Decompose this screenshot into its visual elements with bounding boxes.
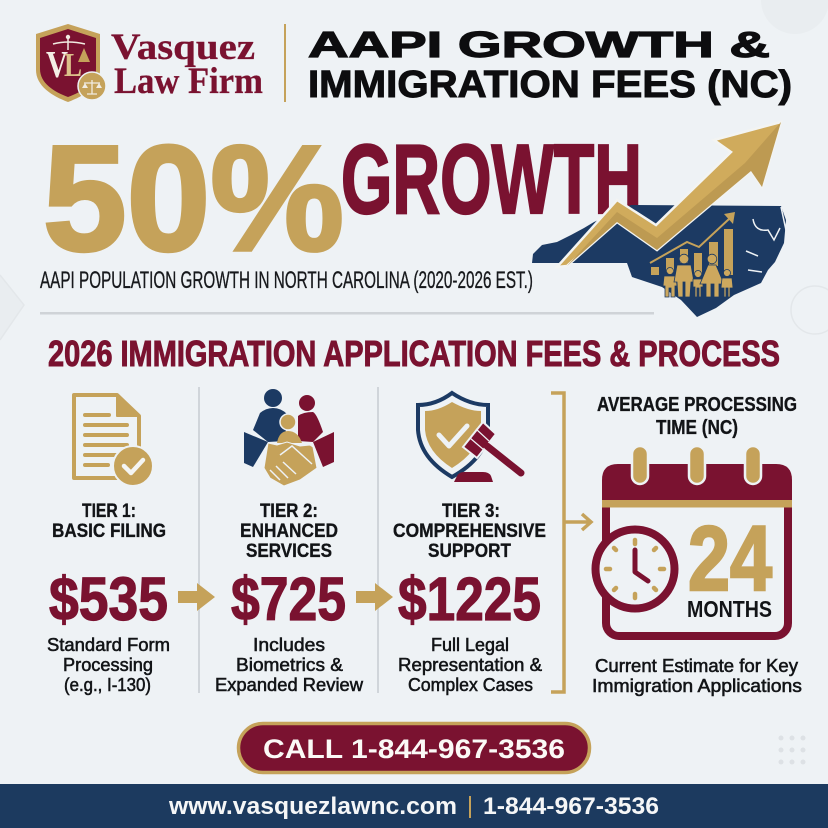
tier 2 description (215, 635, 364, 695)
footer bar: www.vasquezlawnc.com (168, 793, 457, 820)
tier 2 description: Expanded Review (215, 675, 364, 695)
tier 2 label: TIER 2: (260, 501, 318, 522)
big stat: 50%: 50% (43, 114, 344, 282)
map: North Carolina (532, 205, 786, 317)
logo: Vasquez Law Firm (36, 24, 263, 102)
big stat: 24 months: 24 (688, 508, 772, 610)
tier 2 label (240, 501, 338, 562)
icon: people and handshake (244, 389, 334, 486)
footer bar (0, 784, 828, 828)
tier 1 description: (e.g., I-130) (64, 675, 151, 695)
processing time note: Immigration Applications (592, 676, 802, 696)
icon: shield emblem: V (46, 44, 68, 86)
icon: clock (596, 530, 674, 608)
title: IMMIGRATION FEES (NC) (308, 64, 792, 106)
tier 3 label: SUPPORT (428, 541, 511, 562)
tier 3 description: Full Legal (431, 635, 509, 655)
arrow: bracket to processing time (551, 393, 591, 692)
processing time note: Current Estimate for Key (595, 656, 798, 676)
icon: shield and gavel (418, 393, 521, 482)
call to action button (238, 724, 590, 772)
tier 3 description (398, 635, 542, 695)
tier 3 description: Representation & (398, 655, 542, 675)
panel: tier 3 (393, 393, 546, 695)
processing time heading: AVERAGE PROCESSING (597, 394, 797, 416)
processing time heading: TIME (NC) (656, 417, 738, 439)
tier 3 label (393, 501, 546, 562)
tier 1 price: $535 (49, 565, 168, 633)
tier 1 label: BASIC FILING (52, 521, 166, 542)
title: AAPI GROWTH & (308, 24, 770, 65)
arrow: tier 2 to tier 3 (356, 583, 393, 611)
tier 3 label: TIER 3: (442, 501, 500, 522)
title (308, 24, 792, 106)
big stat: 24 months: MONTHS (687, 596, 772, 622)
mini bar chart (650, 212, 735, 275)
tier 1 description: Standard Form (47, 635, 170, 655)
processing time heading (597, 394, 797, 439)
heading: GROWTH: GROWTH (341, 124, 642, 234)
tier 3 label: COMPREHENSIVE (393, 521, 546, 542)
icon: shield emblem: L (64, 47, 82, 84)
arrow: rising zigzag (557, 122, 781, 267)
tier 1 description: Processing (63, 655, 153, 675)
tier 2 label: SERVICES (246, 541, 332, 562)
logo wordmark (111, 27, 263, 102)
tier 1 label (52, 501, 166, 542)
tier 2 description: Includes (253, 635, 325, 655)
tier 1 description (47, 635, 170, 695)
call to action button: CALL 1-844-967-3536 (263, 734, 565, 764)
processing time note (592, 656, 802, 696)
footer bar: 1-844-967-3536 (483, 793, 659, 820)
map of North Carolina with growth arrow (532, 122, 792, 317)
logo wordmark: Vasquez (111, 27, 255, 68)
icon: shield emblem (36, 24, 106, 102)
tier 3 description: Complex Cases (408, 675, 533, 695)
icon: calendar (602, 446, 792, 636)
tier 3 price: $1225 (398, 565, 541, 633)
panel: average processing time (592, 394, 802, 696)
tier 2 description: Biometrics & (236, 655, 343, 675)
icon: document with check (74, 395, 153, 486)
panel: tier 1 (47, 395, 170, 695)
icon: family (663, 254, 733, 297)
tier 1 label: TIER 1: (82, 501, 136, 522)
arrow: tier 1 to tier 2 (178, 583, 215, 611)
tier 2 label: ENHANCED (240, 521, 338, 542)
logo wordmark: Law Firm (114, 61, 263, 102)
panel: tier 2 (215, 389, 364, 695)
subtitle: AAPI POPULATION GROWTH IN NORTH CAROLINA (2020-2026 EST.) (40, 267, 533, 294)
tier 2 price: $725 (231, 565, 346, 633)
